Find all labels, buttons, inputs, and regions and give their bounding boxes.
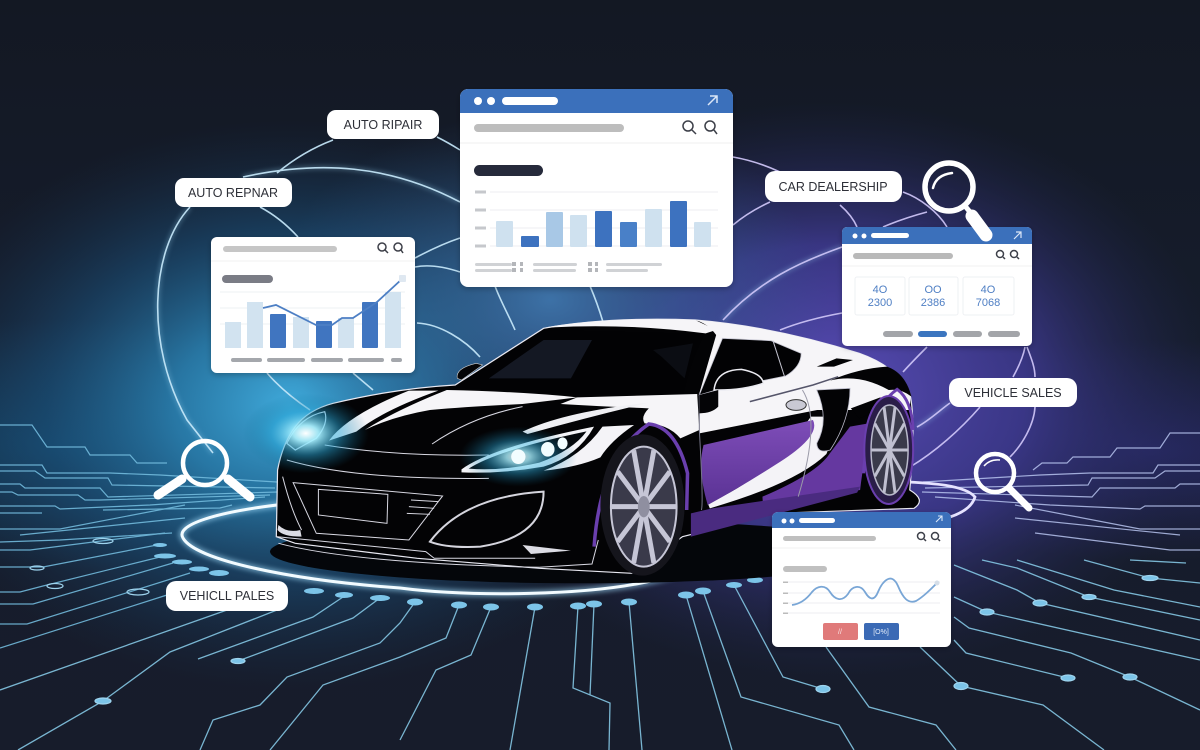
fender highlight bbox=[544, 425, 634, 471]
panel: right stats window bbox=[842, 227, 1032, 346]
glowing ring around car bbox=[182, 482, 975, 594]
windshield bbox=[455, 330, 704, 394]
window header bbox=[842, 227, 1032, 244]
icon: magnifier top right bbox=[925, 163, 986, 235]
circuit lines right bbox=[922, 433, 1200, 550]
LEDs bbox=[511, 437, 568, 464]
stat cards: OO bbox=[924, 284, 942, 296]
stat cards: 4O bbox=[873, 284, 888, 296]
icon: magnifier left bbox=[158, 441, 250, 497]
label: car dealership bbox=[765, 171, 902, 202]
buttons: // bbox=[838, 629, 842, 636]
air intake bbox=[430, 492, 544, 547]
hood white panels bbox=[329, 391, 438, 441]
arcs left crisp bbox=[158, 137, 603, 453]
purple rear quarter bbox=[762, 423, 873, 504]
circuit lines bottom bbox=[0, 560, 1200, 750]
hood streaks bbox=[523, 403, 649, 434]
search icons bbox=[683, 121, 717, 134]
label: auto repair top bbox=[327, 110, 439, 139]
left headlight bbox=[287, 412, 326, 450]
arcs blurred glow bbox=[158, 168, 950, 453]
door details bbox=[750, 377, 838, 402]
label: vehicle sales bbox=[949, 378, 1077, 407]
panel: top bar chart window bbox=[460, 89, 733, 287]
arcs right crisp bbox=[723, 157, 1035, 467]
purple door bbox=[701, 420, 814, 505]
roof and rear white panels bbox=[695, 320, 911, 433]
side vent bbox=[817, 388, 850, 451]
wheel arch purple bbox=[594, 424, 688, 547]
front face lines bbox=[276, 445, 598, 567]
connection arcs bbox=[158, 137, 1035, 467]
lamp glows bbox=[243, 393, 369, 473]
car body bbox=[276, 319, 919, 573]
label: auto repair left bbox=[175, 178, 292, 207]
circuit lines left bbox=[0, 425, 278, 648]
rear black stripes bbox=[817, 358, 911, 418]
trend line bbox=[263, 279, 402, 325]
label: vehicle sales: VEHICLE SALES bbox=[964, 386, 1062, 400]
buttons bbox=[823, 623, 899, 640]
car bbox=[243, 319, 919, 583]
stat cards: 4O bbox=[981, 284, 996, 296]
stat cards: 7068 bbox=[976, 297, 1000, 309]
ringed circuit nodes bbox=[30, 538, 1158, 704]
window header bbox=[772, 512, 951, 528]
label: vehicle pales: VEHICLL PALES bbox=[180, 589, 274, 603]
bars bbox=[225, 292, 401, 348]
panel: left bar and line chart window bbox=[211, 237, 415, 373]
car shadow bbox=[270, 520, 893, 583]
label: vehicle pales bbox=[166, 581, 288, 611]
buttons: [O%] bbox=[873, 629, 889, 636]
window header bbox=[460, 89, 733, 113]
stat cards bbox=[855, 277, 1014, 315]
search icons bbox=[378, 243, 403, 253]
rear wheel bbox=[864, 396, 913, 504]
label: auto repair top: AUTO RIPAIR bbox=[344, 118, 422, 132]
label: auto repair left: AUTO REPNAR bbox=[188, 186, 278, 200]
circuit nodes bbox=[153, 543, 763, 610]
front wheel bbox=[600, 434, 685, 576]
icon: magnifier right bbox=[976, 454, 1029, 508]
side window bbox=[699, 338, 801, 395]
stat cards: 2386 bbox=[921, 297, 945, 309]
left mirror bbox=[457, 363, 483, 380]
right headlight bbox=[462, 427, 594, 473]
label: car dealership: CAR DEALERSHIP bbox=[778, 180, 888, 194]
line chart bbox=[792, 579, 937, 605]
bumper highlights bbox=[278, 525, 571, 554]
stat cards: 2300 bbox=[868, 297, 892, 309]
bar chart bbox=[496, 201, 711, 247]
side mirror bbox=[714, 369, 763, 390]
panel: bottom line chart window bbox=[772, 512, 951, 647]
door white sweep bbox=[708, 417, 831, 508]
